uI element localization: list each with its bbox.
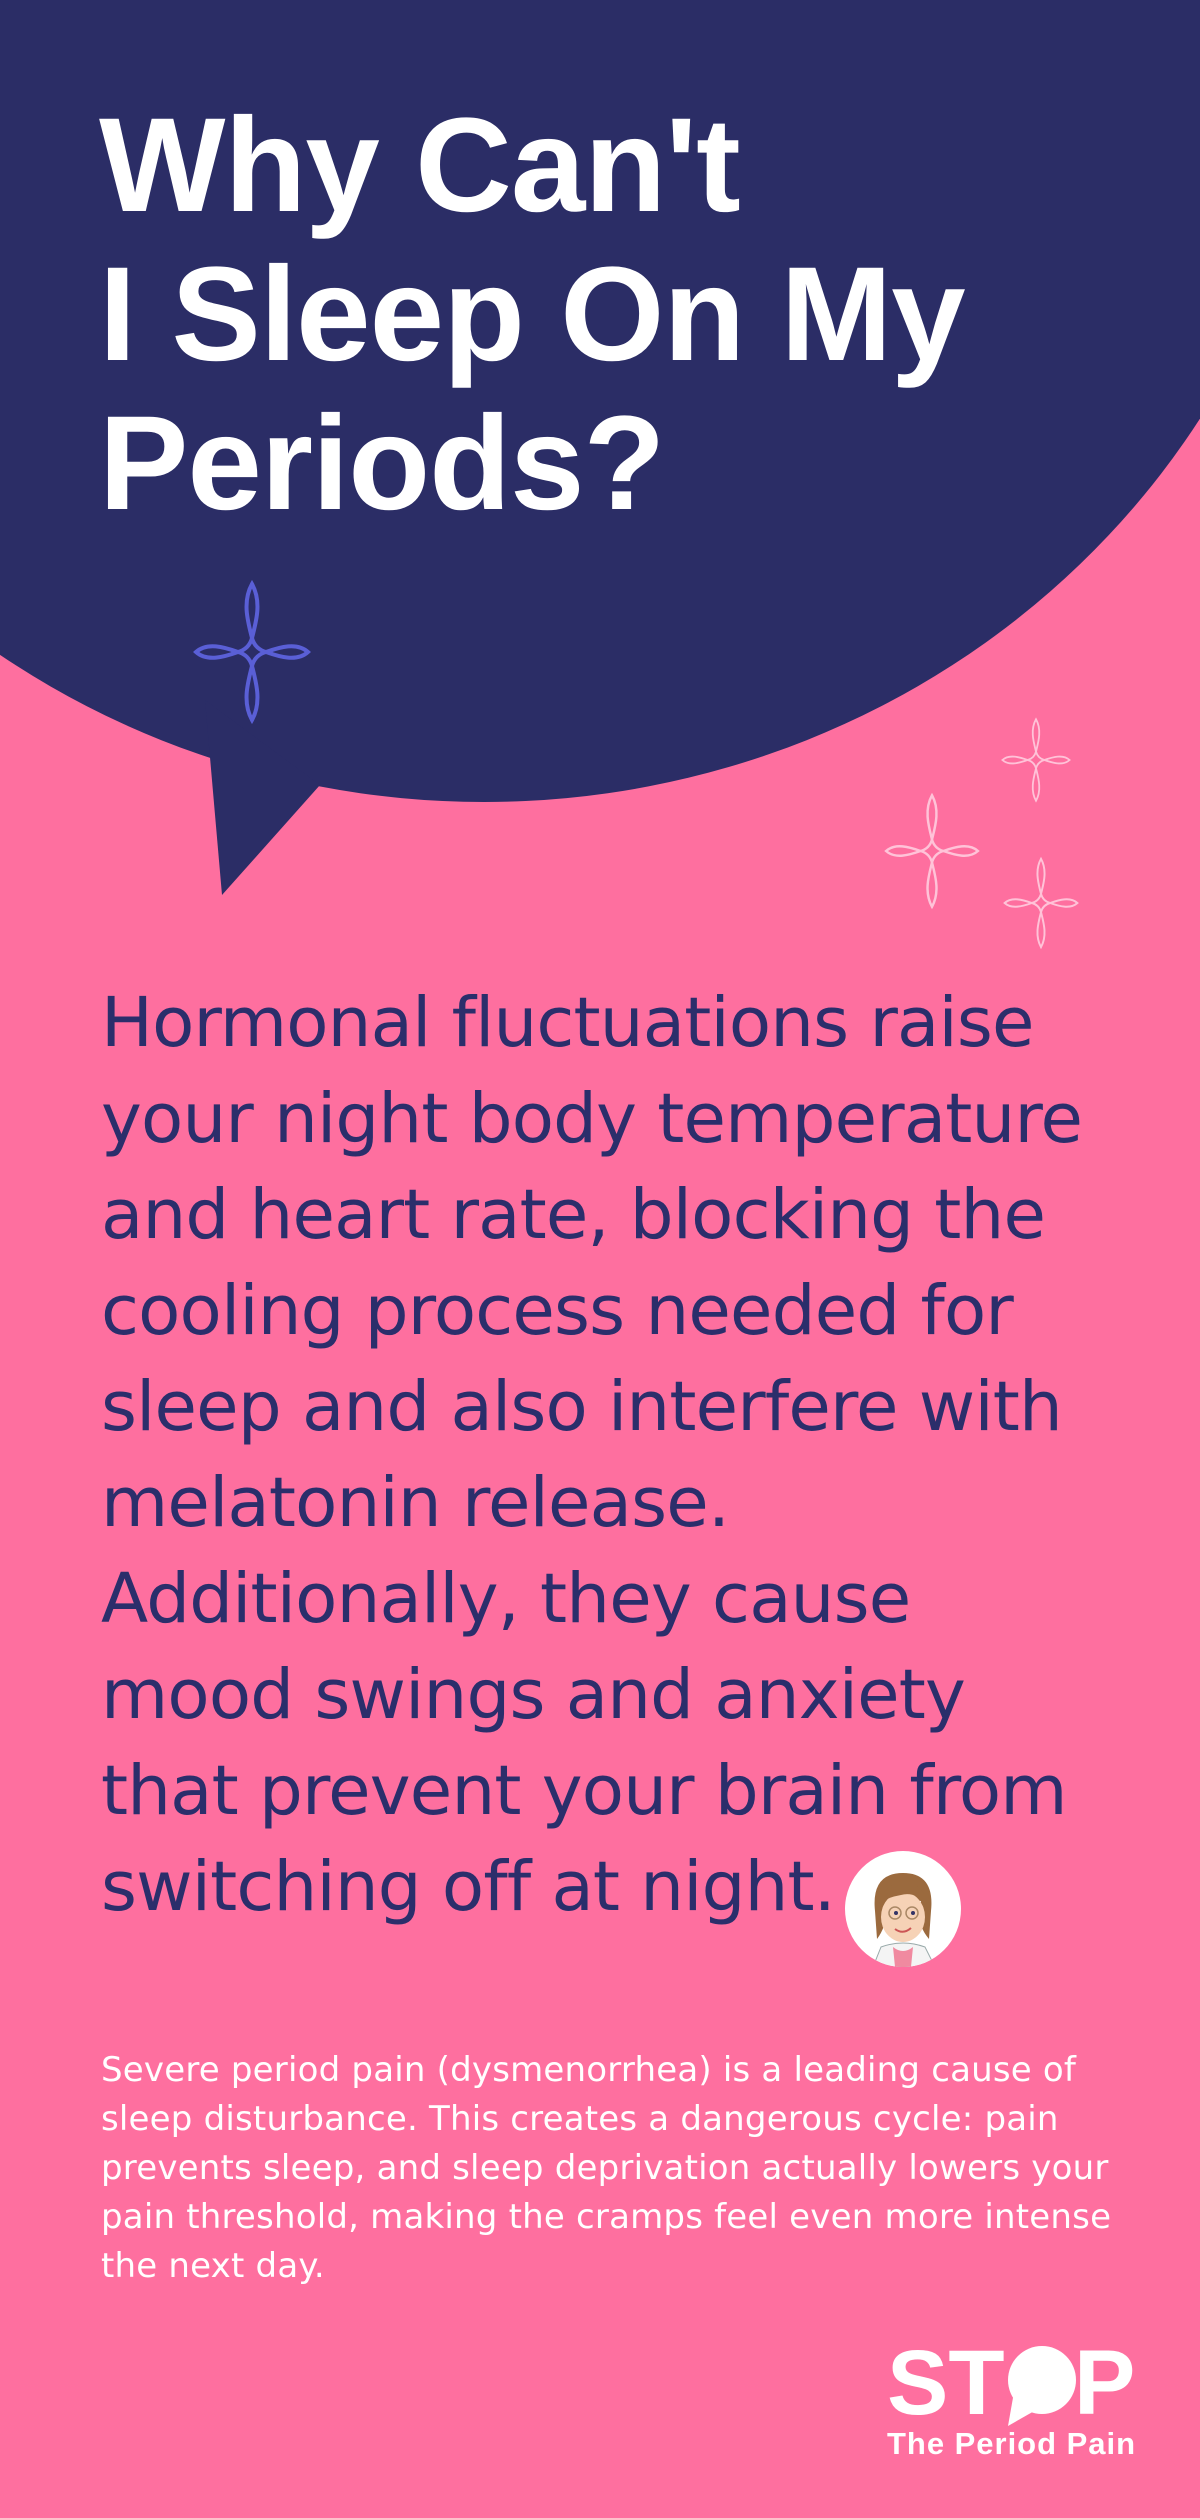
body text: and heart rate, blocking the: [101, 1175, 1045, 1255]
small text: the next day.: [101, 2246, 325, 2286]
icon: speech bubble O: [1008, 2346, 1076, 2426]
body text: Additionally, they cause: [101, 1559, 910, 1639]
icon: blue sparkle: [193, 580, 311, 724]
background: speech bubble: [0, 0, 1200, 895]
title: I Sleep On My: [99, 240, 965, 389]
logo: STOP The Period Pain: The Period Pain: [887, 2426, 1135, 2461]
title: Why Can't: [99, 91, 740, 240]
title: Periods?: [99, 389, 664, 538]
body text: switching off at night.: [101, 1847, 835, 1927]
body text: your night body temperature: [101, 1079, 1082, 1159]
body text: melatonin release.: [101, 1463, 729, 1543]
logo: STOP The Period Pain: P: [1074, 2332, 1135, 2434]
icon: pink sparkles: [884, 718, 1079, 949]
body text: [101, 983, 1082, 1927]
logo: STOP The Period Pain: [887, 2332, 1135, 2461]
small text: Severe period pain (dysmenorrhea) is a leading cause of: [101, 2050, 1076, 2090]
body text: Hormonal fluctuations raise: [101, 983, 1034, 1063]
icon: doctor avatar: [845, 1851, 961, 1967]
small text: [101, 2050, 1111, 2286]
small text: prevents sleep, and sleep deprivation actually lowers your: [101, 2148, 1109, 2188]
body text: that prevent your brain from: [101, 1751, 1067, 1831]
body text: sleep and also interfere with: [101, 1367, 1062, 1447]
small text: pain threshold, making the cramps feel even more intense: [101, 2197, 1111, 2237]
title: [99, 91, 965, 538]
small text: sleep disturbance. This creates a dangerous cycle: pain: [101, 2099, 1059, 2139]
body text: cooling process needed for: [101, 1271, 1013, 1351]
logo: STOP The Period Pain: ST: [887, 2332, 1005, 2434]
body text: mood swings and anxiety: [101, 1655, 965, 1735]
